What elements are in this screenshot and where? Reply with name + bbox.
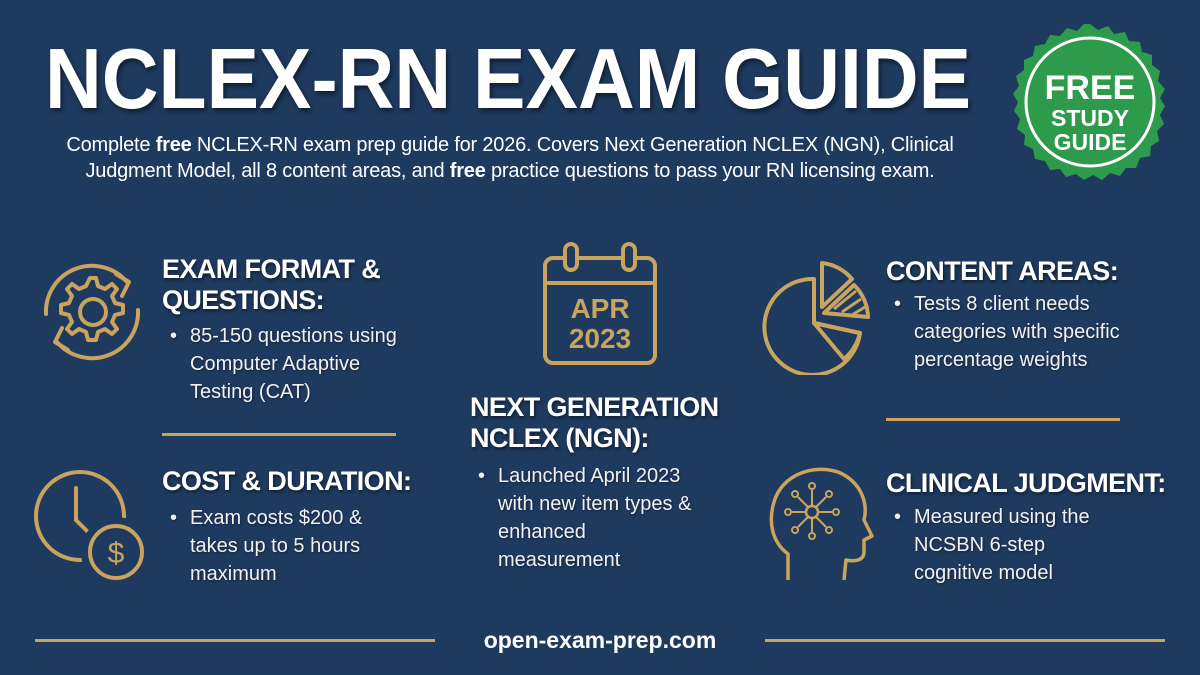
bullet text: Tests 8 client needs <box>914 293 1090 315</box>
section: exam format <box>162 254 398 404</box>
footer url: open-exam-prep.com <box>484 627 716 653</box>
bullet text <box>894 506 1090 584</box>
bullet text: with new item types & <box>498 493 691 515</box>
heading: CLINICAL JUDGMENT: <box>886 468 1166 498</box>
icon: pie chart <box>762 261 870 375</box>
bullet text: Launched April 2023 <box>498 465 680 487</box>
bullet text: Measured using the <box>914 506 1090 528</box>
bullet text: Testing (CAT) <box>190 381 311 403</box>
bullet text: Exam costs $200 & <box>190 507 362 529</box>
heading: EXAM FORMAT & <box>162 254 380 284</box>
bullet text <box>170 507 363 585</box>
badge: free study guide: STUDY <box>1051 105 1129 131</box>
subtitle: Judgment Model, all 8 content areas, and free practice questions to pass your RN licensing exam. <box>85 160 935 182</box>
bullet text: enhanced <box>498 521 586 543</box>
badge: free study guide <box>1013 24 1165 180</box>
heading: CONTENT AREAS: <box>886 256 1118 286</box>
bullet text <box>478 465 692 571</box>
section: clinical judgment <box>886 468 1166 584</box>
heading: NCLEX (NGN): <box>470 423 649 453</box>
section: next generation <box>470 392 720 571</box>
icon: gear with cycle arrows <box>44 264 140 360</box>
heading <box>470 392 720 456</box>
bullet text: measurement <box>498 549 620 571</box>
icon: calendar: 2023 <box>569 323 631 354</box>
badge: free study guide: GUIDE <box>1054 129 1126 155</box>
bullet text <box>894 293 1120 372</box>
bullet text: percentage weights <box>914 349 1087 371</box>
icon: head with network <box>770 468 874 580</box>
subtitle: Complete free NCLEX-RN exam prep guide for 2026. Covers Next Generation NCLEX (NGN), Clinical <box>66 134 954 156</box>
heading <box>162 254 382 318</box>
bullet text: 85-150 questions using <box>190 325 397 347</box>
section: cost <box>162 466 412 585</box>
badge: free study guide: FREE <box>1045 69 1135 107</box>
section: content areas <box>886 256 1120 372</box>
bullet text: Computer Adaptive <box>190 353 360 375</box>
subtitle <box>66 134 954 182</box>
title: NCLEX-RN EXAM GUIDE <box>45 32 971 127</box>
bullet text: maximum <box>190 563 277 585</box>
bullet text <box>170 325 398 404</box>
heading: QUESTIONS: <box>162 285 324 315</box>
heading: COST & DURATION: <box>162 466 411 496</box>
bullet text: NCSBN 6-step <box>914 534 1045 556</box>
icon: clock and dollar: $ <box>108 537 125 570</box>
bullet text: takes up to 5 hours <box>190 535 360 557</box>
heading: NEXT GENERATION <box>470 392 719 422</box>
bullet text: cognitive model <box>914 562 1053 584</box>
icon: clock and dollar <box>34 470 144 580</box>
icon: calendar <box>543 242 657 365</box>
bullet text: categories with specific <box>914 321 1120 343</box>
icon: calendar: APR <box>570 293 630 324</box>
